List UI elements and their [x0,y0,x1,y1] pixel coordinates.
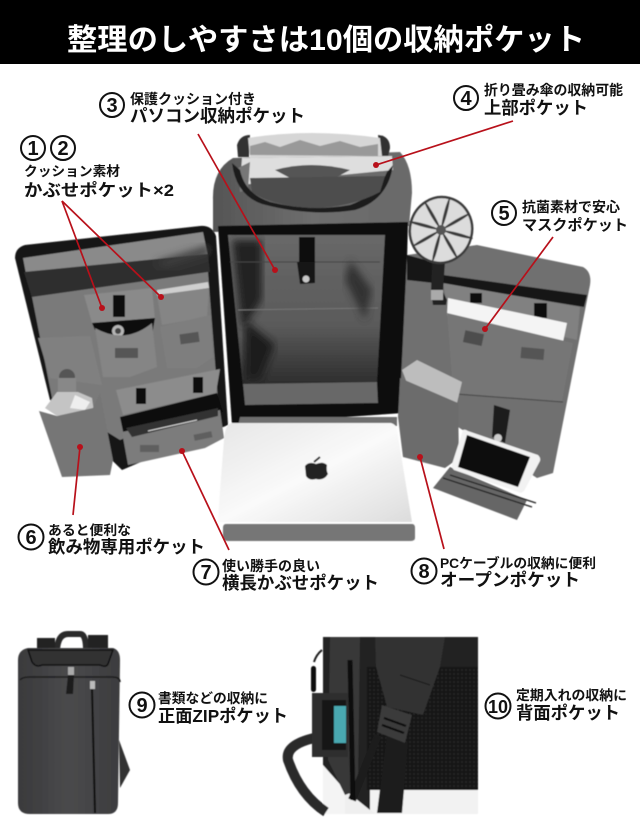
label 7: long flap pocket: 使い勝手の良い [222,558,320,574]
silver top pocket [238,133,393,192]
label 3: PC pocket: 保護クッション付き [130,91,256,107]
label 4: top pocket: 上部ポケット [484,98,588,118]
line 5 [482,237,553,332]
label 9: front zip pocket [130,690,288,726]
laptop [218,423,415,541]
pocket 1 [84,288,157,377]
zip puller [314,650,322,662]
label 4: top pocket: 4 [460,88,472,110]
bottle [45,369,94,416]
bottle pocket [39,393,113,477]
long flap pocket [120,393,224,465]
label 5: mask pocket: マスクポケット [522,217,628,234]
label 1 and 2: cushion flap pockets: 1 [27,138,39,160]
label 5: mask pocket: 5 [498,203,510,225]
line 6 [73,444,83,515]
left open panel [15,226,228,470]
mask pocket [447,313,573,402]
label 7: long flap pocket: 7 [200,562,212,584]
label 6: drink pocket: あると便利な [48,523,131,538]
fan [403,190,479,305]
title: 整理のしやすさは10個の収納ポケット [67,24,585,57]
phone and case [433,430,540,520]
label 4: top pocket: 折り畳み傘の収納可能 [484,82,623,98]
pocket 2 [157,282,213,368]
photo: backpack back [288,637,478,814]
wide pocket flap [116,369,220,415]
header banner [0,0,640,64]
line 2 [62,201,164,300]
line 4 [373,121,513,168]
label 1 and 2: cushion flap pockets: 2 [57,138,69,160]
center backpack [213,133,412,426]
label 6: drink pocket: 飲み物専用ポケット [48,537,205,557]
label 9: front zip pocket: 書類などの収納に [158,690,268,706]
label 7: long flap pocket: 横長かぶせポケット [222,573,379,593]
label 9: front zip pocket: 9 [136,695,148,717]
line 1 [62,201,105,311]
logo [305,463,328,480]
laptop compartment liner [228,235,397,426]
photo: open backpack with pockets [15,133,590,541]
label 6: drink pocket [18,523,205,557]
handles [237,135,250,157]
line 3 [198,134,278,273]
label 1 and 2: cushion flap pockets: クッション素材 [24,163,121,179]
label 1 and 2: cushion flap pockets [21,136,174,200]
left strap loop [288,738,326,812]
callout lines [62,121,553,550]
label 7: long flap pocket [194,558,379,593]
right open panel [400,245,590,478]
label 8: open pocket: オープンポケット [440,570,580,590]
label 4: top pocket [454,82,623,118]
label 5: mask pocket: 抗菌素材で安心 [522,199,620,215]
label 3: PC pocket [100,91,305,126]
card pocket [312,693,348,757]
line 8 [417,454,444,549]
open pouch [398,360,462,468]
label 3: PC pocket: 3 [106,95,118,117]
label 1 and 2: cushion flap pockets: かぶせポケット×2 [24,180,174,200]
label 8: open pocket: PCケーブルの収納に便利 [440,555,596,571]
label 10: back pocket: 背面ポケット [516,703,620,723]
label 8: open pocket: 8 [418,561,430,583]
mesh back panel [367,667,478,790]
label 8: open pocket [412,555,596,590]
label 5: mask pocket [492,199,628,234]
label 10: back pocket: 定期入れの収納に [516,687,627,703]
label 9: front zip pocket: 正面ZIPポケット [158,706,288,726]
label 10: back pocket: 10 [488,697,508,717]
photo: backpack front [18,634,130,814]
label 10: back pocket [486,687,627,723]
label 3: PC pocket: パソコン収納ポケット [130,106,305,126]
teal card [334,706,346,743]
label 6: drink pocket: 6 [25,527,37,549]
shoulder strap [352,637,445,813]
line 7 [179,448,229,550]
